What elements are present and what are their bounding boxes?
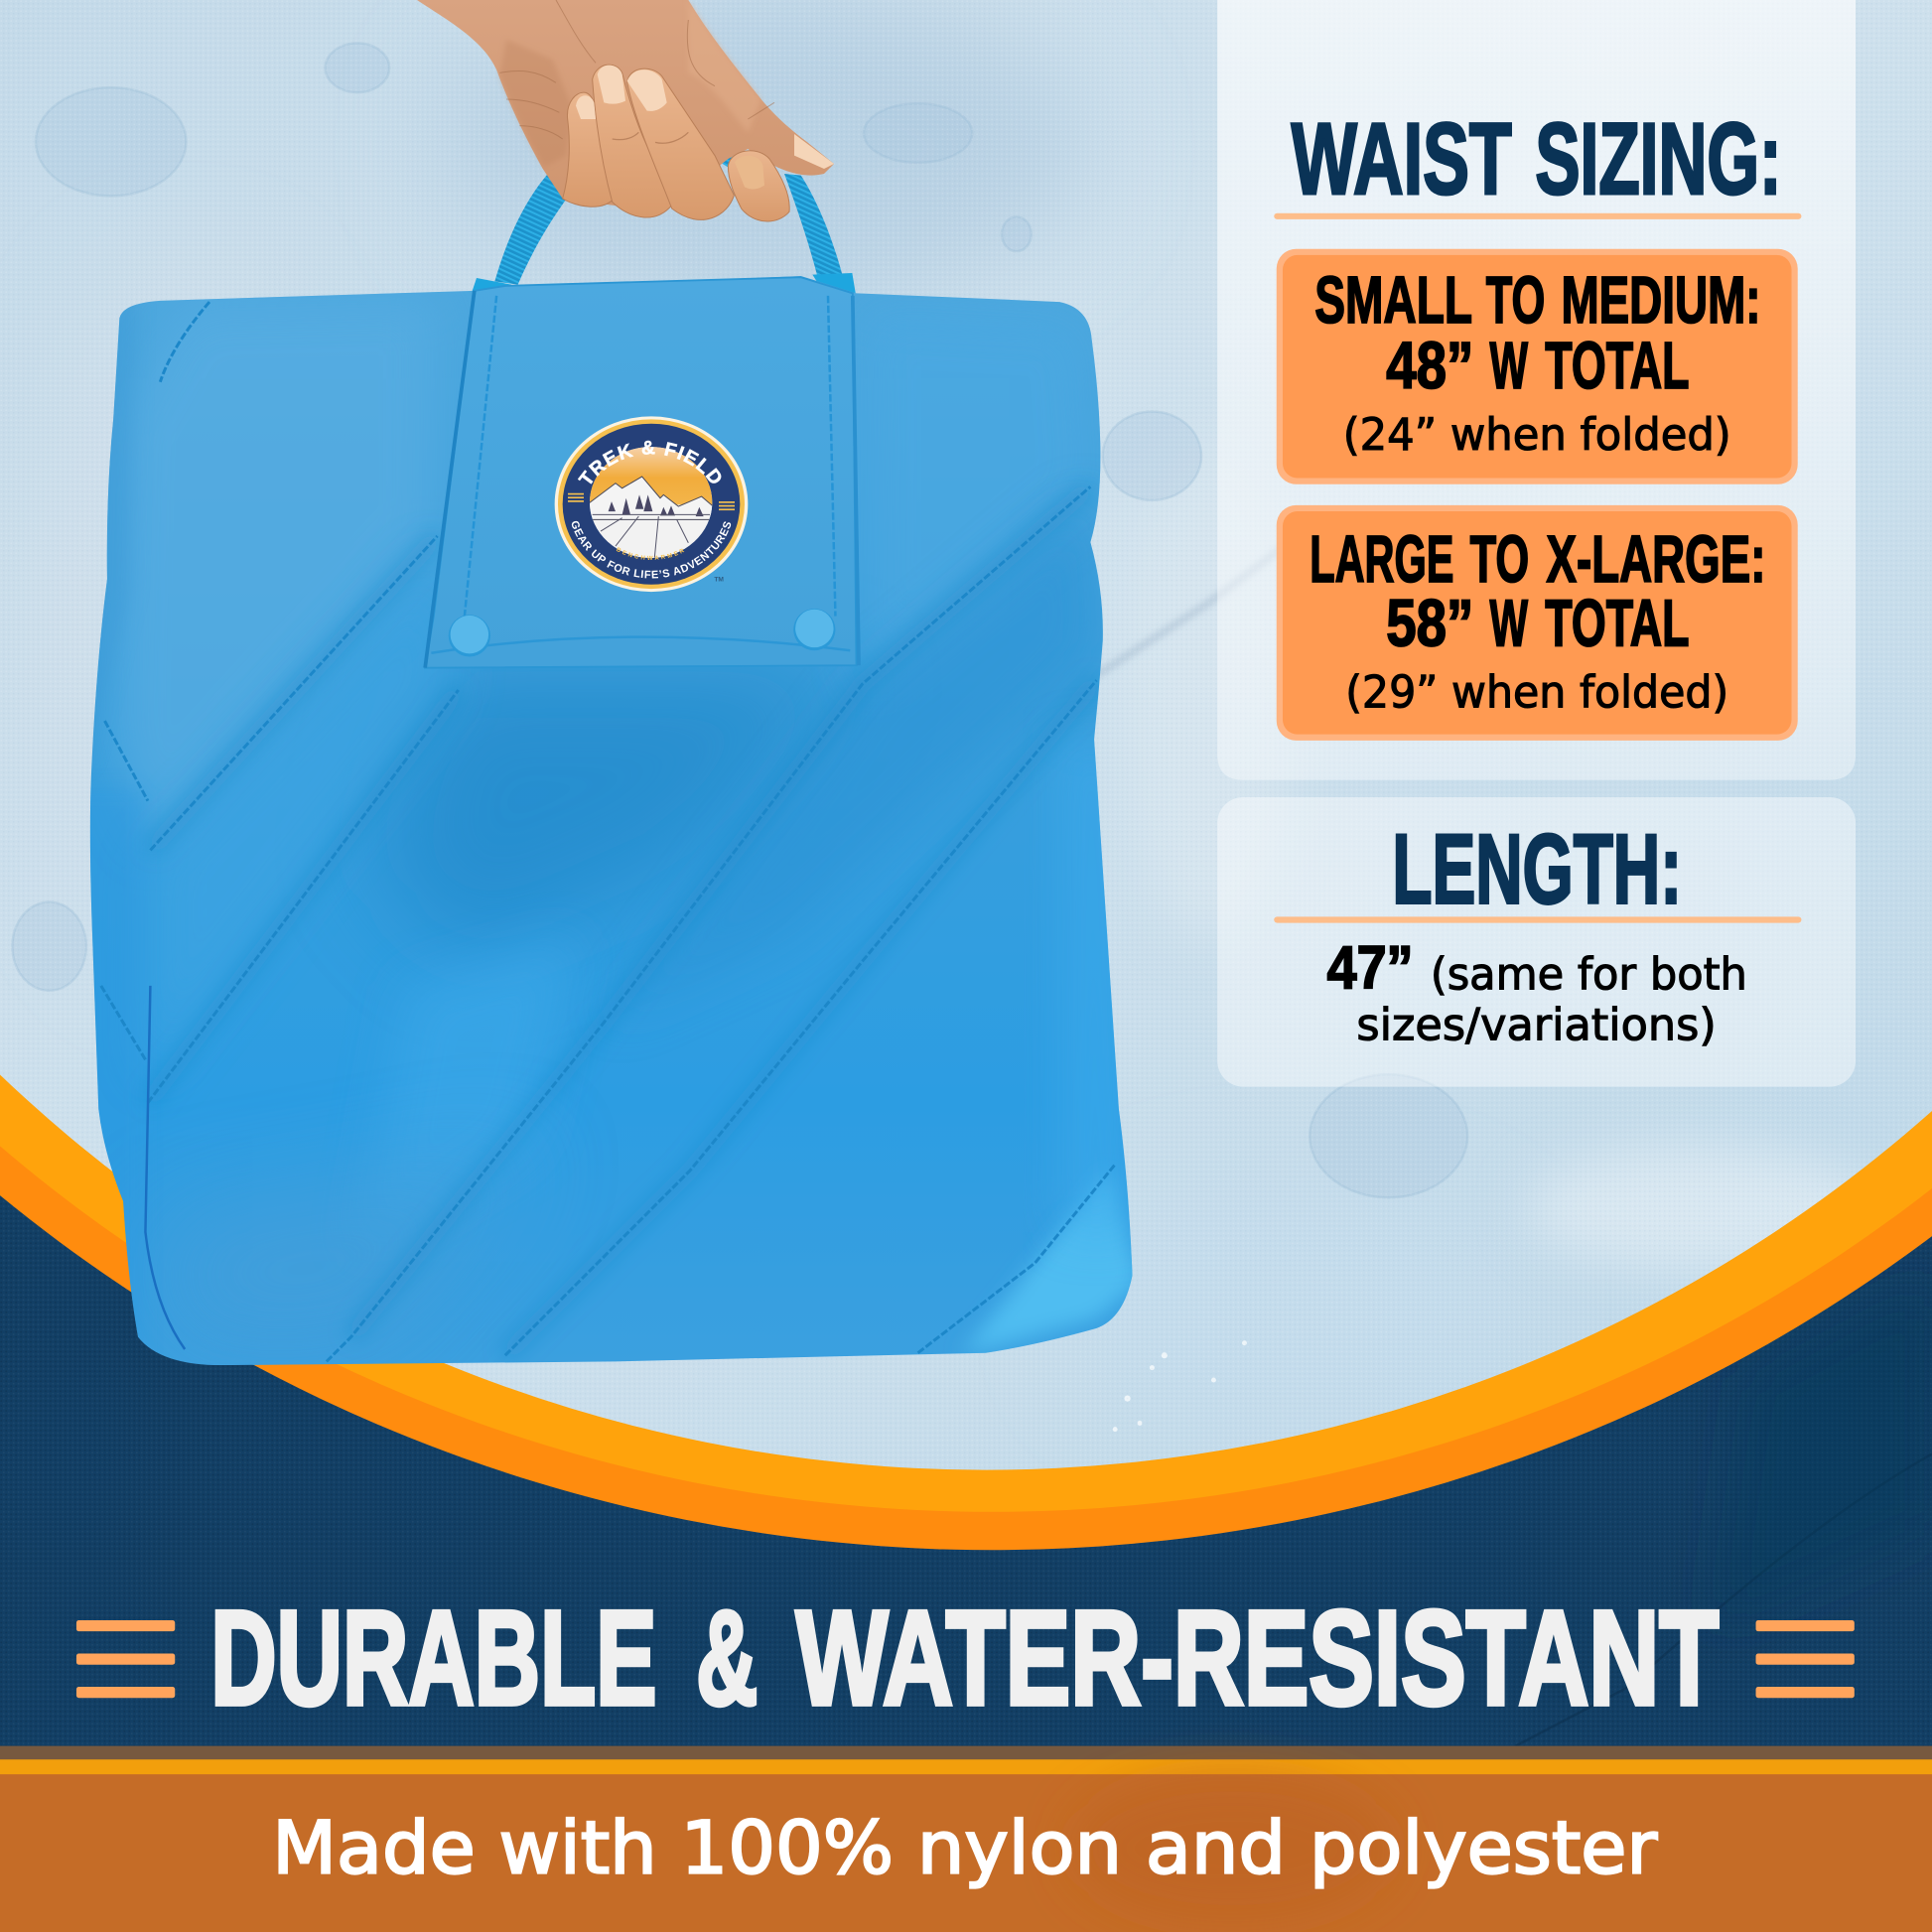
card: large to x-large: TOTAL [1545, 586, 1690, 660]
card: small to medium [1277, 249, 1798, 484]
droplets [12, 43, 1467, 1197]
pocket flap [425, 277, 859, 668]
length value [1327, 933, 1747, 1050]
material caption: Made with 100% nylon and polyester [272, 1806, 1658, 1890]
card: large to x-large: W [1489, 586, 1528, 660]
length value: 47” [1327, 933, 1414, 1001]
card: small to medium: TOTAL [1545, 329, 1690, 403]
snap button right [793, 609, 835, 650]
card: large to x-large: LARGE [1310, 522, 1453, 597]
main headline: & [696, 1583, 758, 1732]
panel: length [1217, 797, 1856, 1087]
seam shadows [148, 486, 1097, 1355]
length value: (same for both [1431, 949, 1747, 1001]
card: large to x-large: TO [1470, 522, 1529, 597]
card: large to x-large: (29” when folded) [1345, 666, 1728, 718]
palm and thumb [417, 0, 834, 211]
heading: waist sizing: WAIST [1292, 102, 1512, 215]
card: small to medium: SMALL [1314, 263, 1472, 338]
logo badge: TM [714, 576, 724, 583]
fingernails [576, 66, 834, 189]
heading: length: LENGTH: [1392, 815, 1682, 925]
left side seam [145, 986, 185, 1349]
main headline [210, 1583, 1719, 1732]
left accent bars [76, 1620, 175, 1698]
divider line [1274, 916, 1801, 923]
divider line [1274, 213, 1801, 219]
logo badge: GEAR UP FOR LIFE’S ADVENTURES [572, 520, 731, 578]
main headline: DURABLE [210, 1583, 656, 1732]
card: large to x-large: X-LARGE: [1547, 522, 1765, 597]
card: small to medium: TO [1486, 263, 1545, 338]
logo badge [554, 416, 749, 592]
card: small to medium: (24” when folded) [1343, 409, 1731, 461]
card: small to medium: MEDIUM: [1561, 263, 1760, 338]
snap button left [449, 615, 490, 656]
quilting shading [50, 296, 1140, 1392]
card: large to x-large [1277, 505, 1798, 741]
card: small to medium: W [1489, 329, 1528, 403]
card: large to x-large: 58” [1386, 586, 1473, 660]
folded puffer blanket bag [89, 276, 1132, 1366]
heading: waist sizing [1292, 102, 1782, 215]
quilting seams [101, 302, 1115, 1361]
right accent bars [1756, 1620, 1855, 1698]
headline with side bars [76, 1583, 1855, 1732]
bottom orange material band [0, 1746, 1932, 1932]
hand holding the handle [417, 0, 834, 221]
length value: sizes/variations) [1356, 999, 1717, 1050]
card: small to medium: 48” [1386, 329, 1473, 403]
heading: waist sizing: SIZING: [1535, 102, 1782, 215]
logo badge: TREK & FIELD [578, 441, 721, 484]
logo badge: BENCHWARMER [616, 547, 685, 560]
fingers [563, 65, 789, 221]
panel: waist sizing [1217, 0, 1856, 780]
bag handle straps [472, 142, 856, 293]
